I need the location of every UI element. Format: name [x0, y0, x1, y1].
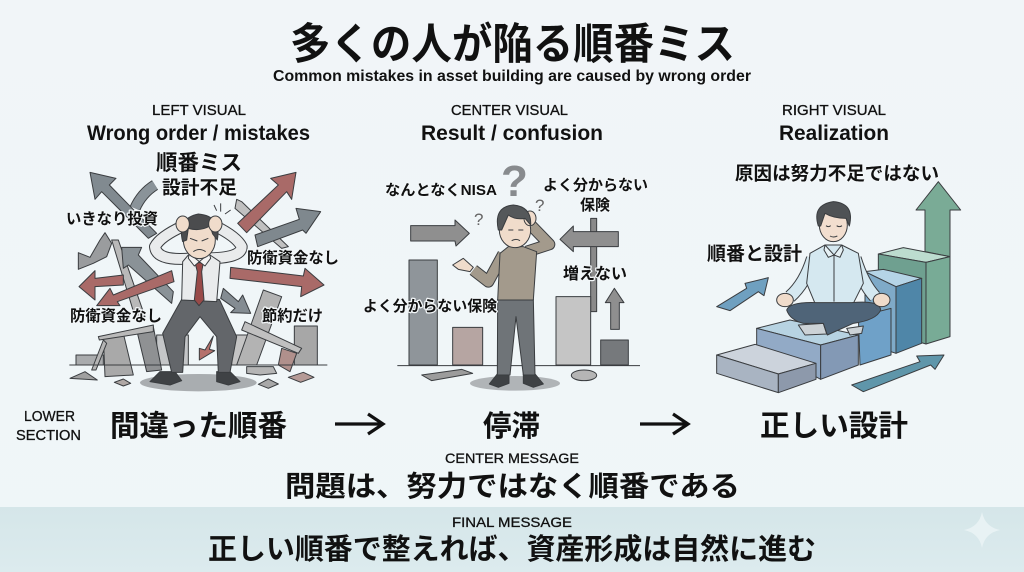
title: 多くの人が陥る順番ミス: [290, 21, 735, 69]
label: いきなり投資: いきなり投資: [66, 209, 158, 228]
lower section label: SECTION: [16, 428, 81, 444]
icon: sparkle: [964, 512, 1000, 548]
center message: 問題は、努力ではなく順番である: [285, 471, 740, 503]
label: 増えない: 増えない: [563, 264, 627, 283]
label: よく分からない保険 upper: 保険: [580, 197, 610, 214]
icon: gray arrows: [411, 220, 624, 329]
label: 設計不足: 設計不足: [162, 177, 237, 198]
lower section label: LOWER: [24, 409, 75, 425]
icon: debris: [422, 369, 597, 381]
icon: rising steps: [717, 248, 950, 393]
arrow: [640, 414, 688, 434]
label: よく分からない保険 upper: よく分からない: [543, 177, 648, 194]
icon: small question mark left: ?: [474, 210, 483, 229]
center visual heading: CENTER VISUAL: [451, 103, 568, 119]
label: 順番ミス: 順番ミス: [156, 151, 242, 175]
final message label: FINAL MESSAGE: [452, 514, 572, 530]
right visual heading: Realization: [779, 122, 889, 145]
center visual heading: Result / confusion: [421, 122, 603, 145]
icon: meditating man: [777, 202, 890, 335]
arrow: [335, 414, 383, 434]
left visual heading: Wrong order / mistakes: [87, 122, 310, 145]
label: 節約だけ: 節約だけ: [262, 306, 323, 325]
center message label: CENTER MESSAGE: [445, 450, 579, 466]
icon: confused man: [453, 205, 560, 391]
right illustration: calm man on rising steps: [717, 182, 961, 393]
subtitle: Common mistakes in asset building are caused by wrong order: [273, 68, 751, 85]
label: 防衛資金なし right: 防衛資金なし: [247, 248, 339, 267]
label: なんとなくNISA: なんとなくNISA: [385, 182, 497, 199]
final message: 正しい順番で整えれば、資産形成は自然に進む: [208, 533, 816, 566]
center illustration: confused man among bars: [397, 205, 640, 391]
step: 間違った順番: 間違った順番: [110, 410, 287, 443]
right visual heading: RIGHT VISUAL: [782, 103, 886, 119]
panel: final message band: [0, 507, 1024, 572]
center visual heading: [421, 103, 603, 145]
label: よく分からない保険 upper: [543, 177, 648, 214]
icon: large question mark: ?: [501, 157, 528, 206]
label: 防衛資金なし left: 防衛資金なし: [70, 306, 162, 325]
icon: rubble and ground: [69, 233, 327, 388]
step: 正しい設計: 正しい設計: [760, 410, 908, 443]
label: 順番と設計: 順番と設計: [707, 242, 802, 265]
icon: red arrows: [79, 172, 324, 360]
left visual heading: LEFT VISUAL: [152, 103, 246, 119]
icon: small question mark right: ?: [535, 196, 544, 215]
label: よく分からない保険 lower: よく分からない保険: [363, 298, 497, 315]
icon: blue arrows: [717, 278, 944, 392]
icon: green up arrow: [916, 182, 961, 257]
lower section label: [16, 409, 81, 444]
label: 原因は努力不足ではない: 原因は努力不足ではない: [735, 163, 939, 184]
bar chart: [397, 218, 640, 366]
left illustration: stressed man among arrows and rubble: [69, 172, 327, 391]
icon: stressed man: [140, 203, 257, 391]
step: 停滞: 停滞: [483, 410, 540, 443]
left visual heading: [87, 103, 310, 145]
icon: gray arrows: [90, 172, 321, 313]
right visual heading: [779, 103, 889, 145]
